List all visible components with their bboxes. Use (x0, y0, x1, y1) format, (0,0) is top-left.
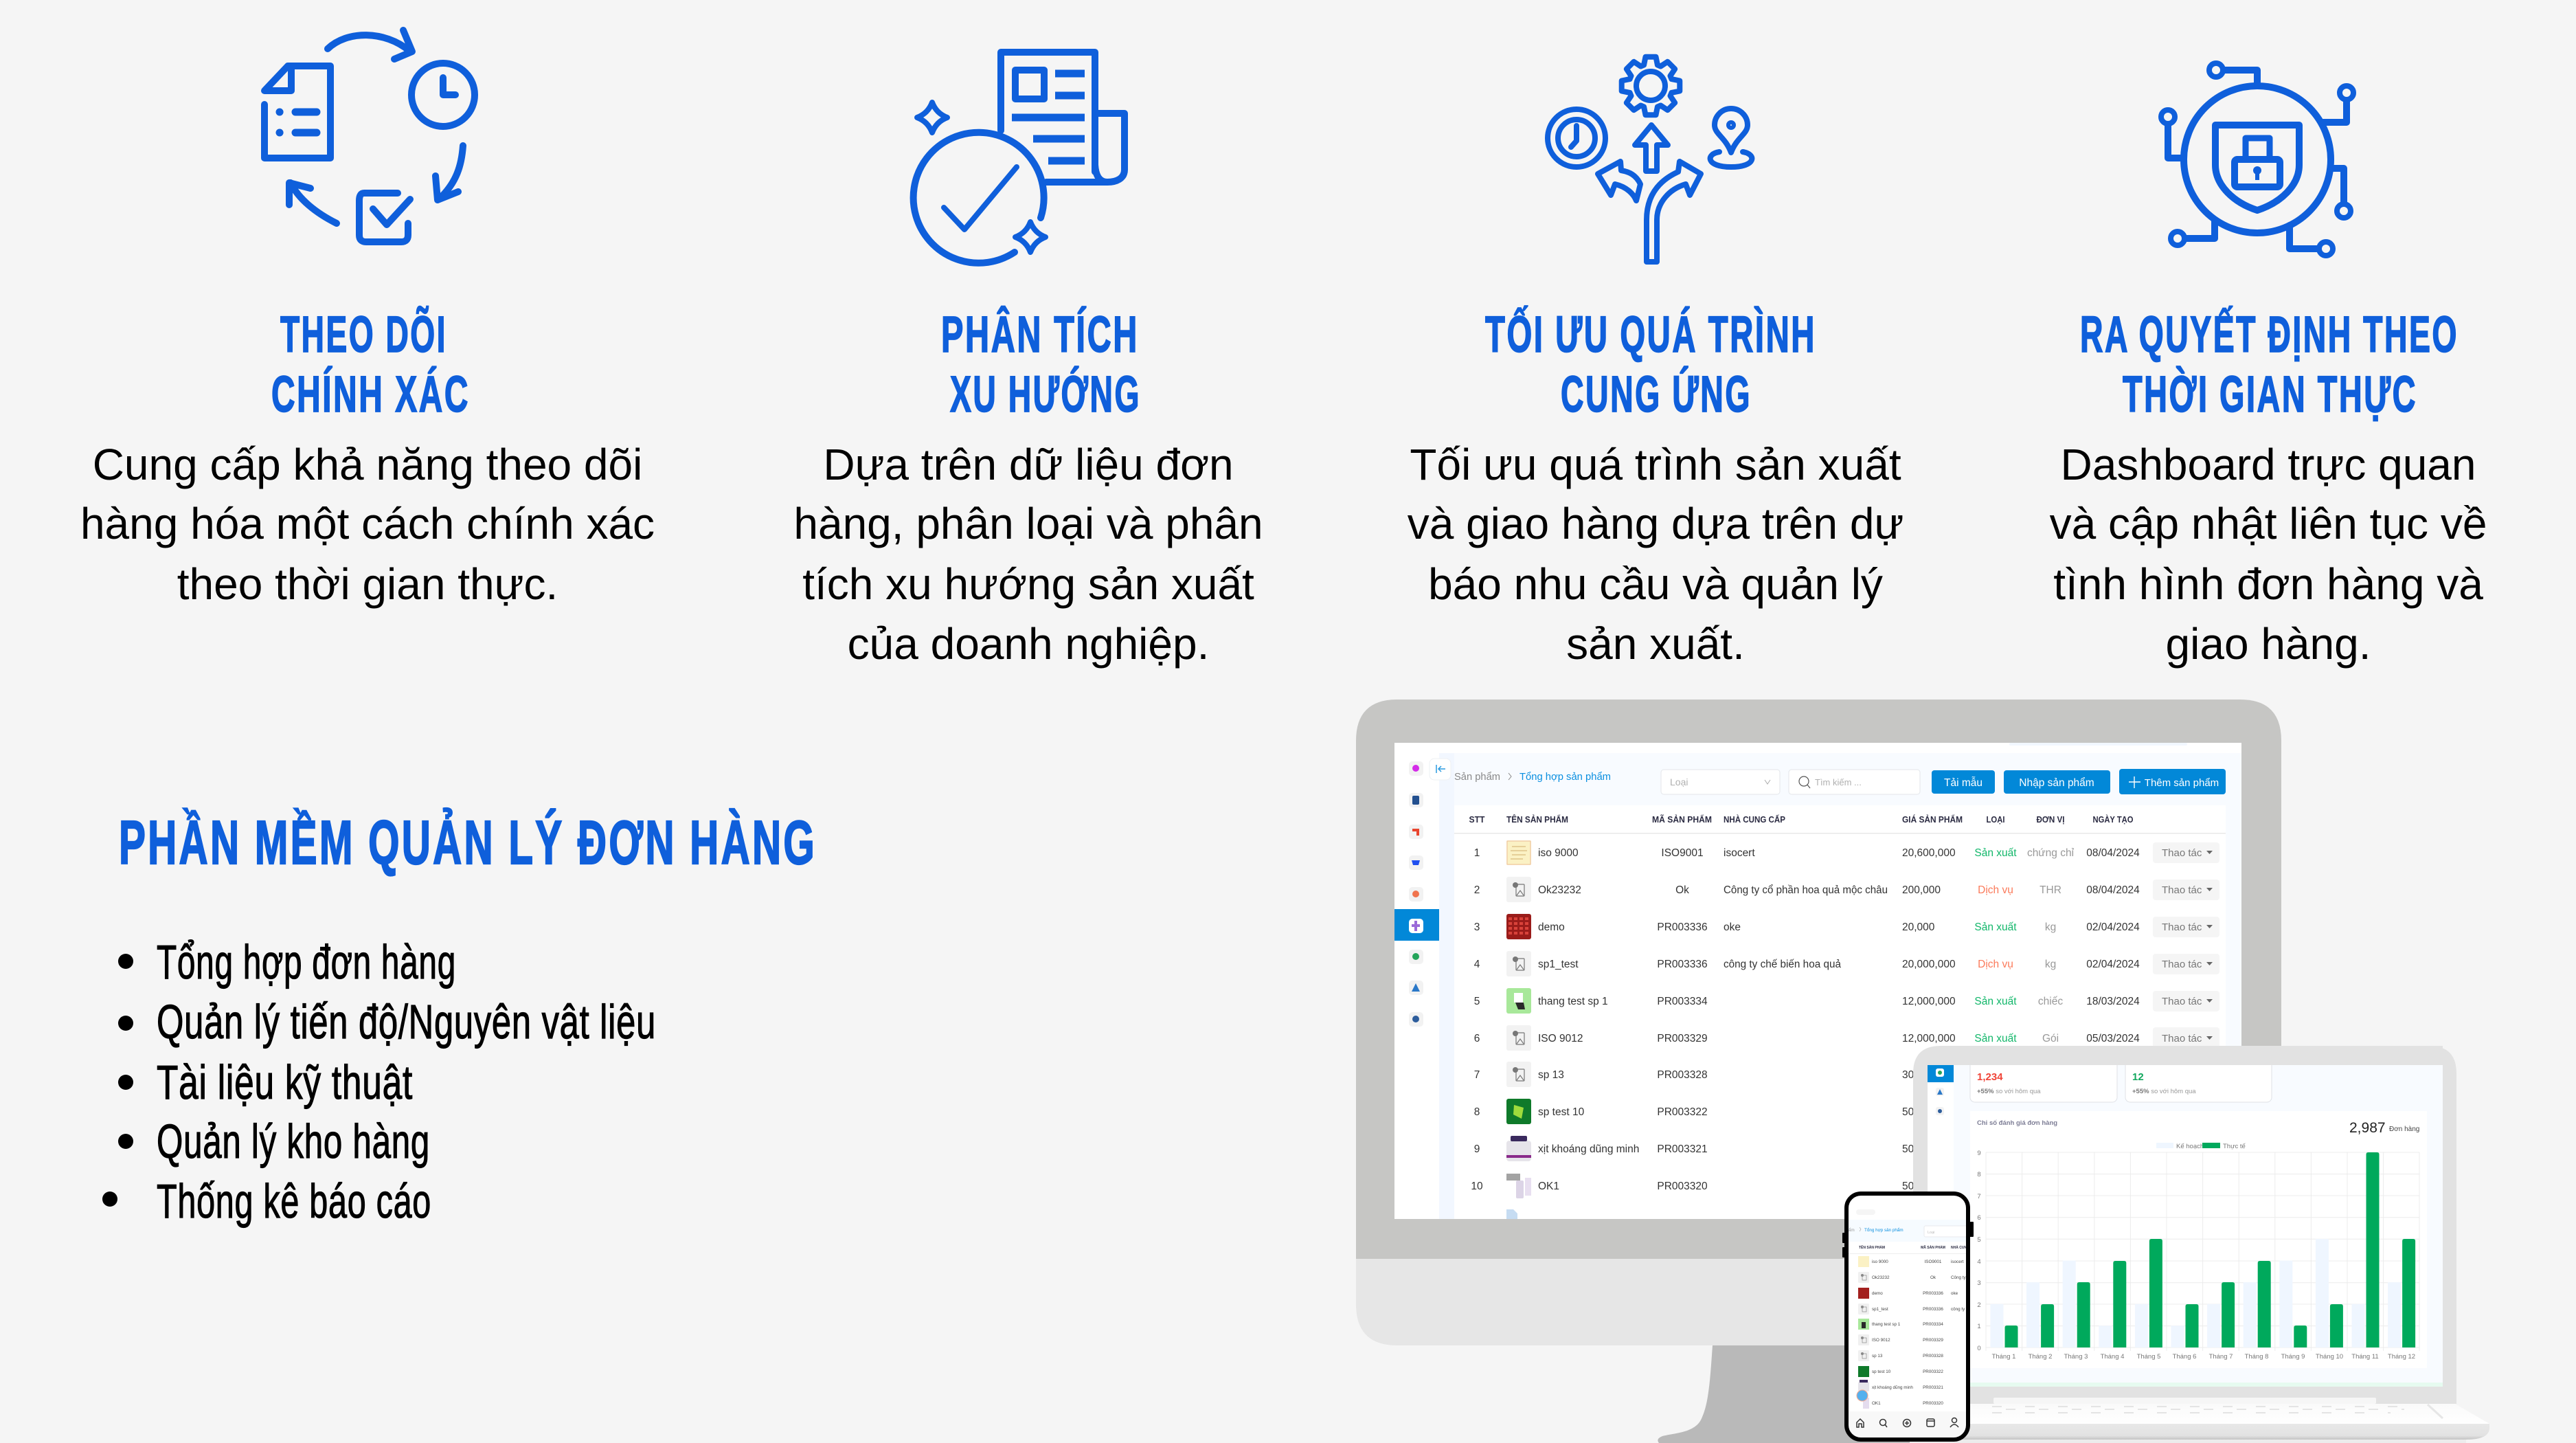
filter dropdown (1661, 770, 1780, 794)
table row 8: 8 (1474, 1106, 1480, 1118)
table row 4: PR003336 (1657, 959, 1708, 970)
monitor mockup (1356, 700, 2281, 1443)
chart grid and axes (1986, 1152, 2419, 1351)
action buttons: Tải mẫu (1944, 777, 1982, 789)
table row 9: xịt khoáng dũng minh (1538, 1143, 1639, 1155)
heading: ra quyet dinh (2080, 306, 2459, 423)
phone filter (1924, 1226, 1969, 1237)
table row 3: kg (2045, 921, 2056, 933)
y axis labels (1977, 1150, 1981, 1352)
table header: GIÁ SẢN PHẨM (1902, 814, 1963, 825)
phone table rows: Ok23232 (1872, 1275, 1890, 1280)
feature list: Quản lý kho hàng (157, 1115, 430, 1168)
phone floating action button (1857, 1390, 1868, 1401)
icon: tracking cycle (264, 30, 475, 242)
chart legend: Thực tế (2223, 1143, 2246, 1150)
laptop mockup (1910, 1046, 2489, 1443)
table row 4 (1474, 951, 2219, 976)
search box: Tìm kiếm ... (1815, 777, 1862, 787)
table row 4: 4 (1474, 959, 1480, 970)
laptop lid (1913, 1046, 2456, 1404)
table row 3: 02/04/2024 (2086, 921, 2140, 933)
laptop screen (1928, 1046, 2443, 1387)
phone table rows: ISO9001 (1925, 1260, 1942, 1264)
text block: ra quyet dinh: và cập nhật liên tục về (2050, 499, 2487, 548)
phone table rows: isocert (1951, 1260, 1964, 1264)
bars: actual (2004, 1152, 2415, 1347)
table row 3: Sản xuất (1974, 921, 2017, 933)
phone breadcrumb: ẩm (1849, 1227, 1855, 1233)
table row 7: 30,000 (1902, 1069, 1935, 1081)
phone side buttons (1842, 1222, 1974, 1257)
table row 5: thang test sp 1 (1538, 996, 1608, 1007)
heading: phan mem quan ly don hang: PHẦN MỀM QUẢN LÝ ĐƠN HÀNG (119, 807, 817, 877)
table row 1: Sản xuất (1974, 847, 2017, 859)
phone table rows: PR003329 (1923, 1338, 1943, 1343)
table row 3: 3 (1474, 921, 1480, 933)
table header: STT (1469, 814, 1485, 825)
laptop base (1910, 1404, 2489, 1443)
x axis labels: Tháng 11 (2351, 1353, 2379, 1361)
table row 6: PR003329 (1657, 1033, 1708, 1044)
table row 4: Thao tác (2162, 959, 2202, 970)
filter dropdown: Loại (1670, 776, 1688, 787)
text block: toi uu qua trinh (1408, 440, 1903, 669)
keyboard hinge bar (1993, 1398, 2376, 1404)
y axis labels: 1 (1977, 1323, 1981, 1330)
phone frame (1846, 1194, 1968, 1440)
chart panel: 2,987 (2349, 1120, 2386, 1136)
table header: ĐƠN VỊ (2036, 814, 2065, 825)
action buttons (1932, 769, 2226, 794)
text block: toi uu qua trinh: báo nhu cầu và quản lý (1428, 559, 1883, 609)
table row 3: demo (1538, 921, 1565, 933)
text block: phan tich xu huong: hàng, phân loại và phân (793, 499, 1263, 548)
phone table rows: OK1 (1872, 1401, 1881, 1406)
breadcrumb: Tổng hợp sản phẩm (1519, 771, 1611, 783)
table header: TÊN SẢN PHẨM (1506, 814, 1568, 825)
table header: NHÀ CUNG CẤP (1724, 814, 1785, 825)
table row 4: 02/04/2024 (2086, 959, 2140, 970)
table row 4: 20,000,000 (1902, 959, 1956, 970)
heading: theo doi chinh xac: CHÍNH XÁC (271, 366, 470, 423)
table row 2: 2 (1474, 884, 1480, 896)
table row 1: isocert (1724, 847, 1755, 859)
table row 1: 08/04/2024 (2086, 847, 2140, 859)
phone table rows: oke (1951, 1291, 1958, 1296)
phone table rows: Ok (1930, 1275, 1936, 1280)
stat card 2 (2125, 1058, 2272, 1102)
panel: ra quyet dinh (2050, 63, 2487, 669)
icon: newspaper and check (914, 52, 1125, 263)
phone table header: MÃ SẢN PHẨM (1921, 1245, 1945, 1250)
y axis labels: 2 (1977, 1301, 1981, 1309)
phone table rows (1858, 1256, 1967, 1409)
x axis labels: Tháng 7 (2209, 1353, 2233, 1361)
stat card 2: 12 (2132, 1071, 2144, 1083)
table row 6: 05/03/2024 (2086, 1033, 2140, 1044)
table row 1: 20,600,000 (1902, 847, 1956, 859)
phone table header: NHÀ CUNG (1951, 1245, 1969, 1250)
phone table rows: PR003321 (1923, 1385, 1943, 1390)
y axis labels: 8 (1977, 1171, 1981, 1178)
monitor chin (1356, 1251, 2281, 1345)
table row 1: chứng chỉ (2027, 847, 2075, 859)
heading: toi uu qua trinh: TỐI ƯU QUÁ TRÌNH (1485, 306, 1816, 363)
text block: phan tich xu huong: của doanh nghiệp. (848, 619, 1209, 669)
table header: LOẠI (1987, 814, 2004, 825)
table background (1454, 805, 2226, 1219)
chart panel: Đơn hàng (2389, 1126, 2419, 1133)
x axis labels: Tháng 10 (2316, 1353, 2343, 1361)
table row 2: Thao tác (2162, 884, 2202, 896)
feature list: Thống kê báo cáo (157, 1174, 431, 1228)
text block: theo doi chinh xac: hàng hóa một cách chính xác (80, 499, 655, 548)
chart legend: Kế hoạch (2176, 1143, 2204, 1150)
table row 5: 18/03/2024 (2086, 996, 2140, 1007)
panel: theo doi chinh xac (80, 30, 655, 609)
x axis labels: Tháng 9 (2281, 1353, 2305, 1361)
text block: toi uu qua trinh: Tối ưu quá trình sản xuất (1410, 440, 1901, 489)
feature list: Tổng hợp đơn hàng (157, 935, 456, 989)
x axis labels: Tháng 5 (2137, 1353, 2160, 1361)
y axis labels: 3 (1977, 1279, 1981, 1287)
panel: toi uu qua trinh cung ung (1408, 57, 1903, 669)
table row 10 (1471, 1174, 1935, 1198)
text block: toi uu qua trinh: sản xuất. (1566, 619, 1745, 669)
stat card 1: 1,234 (1977, 1071, 2003, 1083)
feature list: Quản lý tiến độ/Nguyên vật liệu (157, 995, 656, 1049)
x axis labels: Tháng 6 (2173, 1353, 2196, 1361)
monitor stand (1658, 1345, 1965, 1443)
table row 7 (1474, 1062, 1935, 1087)
table row 2: Công ty cổ phần hoa quả mộc châu (1724, 884, 1888, 896)
table row 6: Thao tác (2162, 1033, 2202, 1044)
text block: ra quyet dinh: tình hình đơn hàng và (2053, 559, 2483, 609)
table row 7: 7 (1474, 1069, 1480, 1081)
table row 2: Ok (1675, 884, 1689, 896)
y axis labels: 4 (1977, 1258, 1981, 1266)
heading: phan tich xu huong (941, 306, 1141, 423)
x axis labels: Tháng 3 (2064, 1353, 2088, 1361)
text block: theo doi chinh xac: Cung cấp khả năng theo dõi (93, 440, 642, 489)
x axis labels: Tháng 4 (2101, 1353, 2124, 1361)
lid cover over card tops (1954, 1046, 2443, 1065)
x axis labels (1992, 1353, 2415, 1361)
text block: ra quyet dinh: giao hàng. (2166, 619, 2371, 669)
table row 3: Thao tác (2162, 921, 2202, 933)
table row 1: Thao tác (2162, 847, 2202, 859)
table row 7: PR003328 (1657, 1069, 1708, 1081)
text block: phan tich xu huong: tích xu hướng sản xuất (802, 559, 1254, 609)
table row 1: 1 (1474, 847, 1480, 859)
table row 5: PR003334 (1657, 996, 1708, 1007)
table row 11 partial thumbnail (1506, 1209, 1517, 1219)
action buttons: Nhập sản phẩm (2019, 777, 2094, 789)
table row 8: sp test 10 (1538, 1106, 1585, 1118)
text block: theo doi chinh xac: theo thời gian thực. (177, 559, 558, 609)
phone table rows: xịt khoáng dũng minh (1872, 1385, 1913, 1390)
text block: ra quyet dinh: Dashboard trực quan (2061, 440, 2476, 489)
table header: NGÀY TẠO (2092, 814, 2134, 825)
table row 9: 50,000 (1902, 1143, 1935, 1155)
table row 8: PR003322 (1657, 1106, 1708, 1118)
table header: MÃ SẢN PHẨM (1652, 814, 1712, 825)
y axis labels: 5 (1977, 1236, 1981, 1244)
breadcrumb (1454, 771, 1611, 783)
phone table rows: demo (1872, 1291, 1883, 1296)
heading: theo doi chinh xac (271, 306, 470, 423)
table row 2 (1474, 877, 2219, 902)
table row 4: kg (2045, 959, 2056, 970)
table row 10: 10 (1471, 1181, 1483, 1192)
table row 1: iso 9000 (1538, 847, 1579, 859)
table row 9: PR003321 (1657, 1143, 1708, 1155)
phone screen (1849, 1196, 1969, 1438)
table row 5: Thao tác (2162, 996, 2202, 1007)
laptop sidebar (1928, 1065, 1954, 1387)
phone table rows: PR003336 (1923, 1291, 1943, 1296)
stat card 1 (1970, 1058, 2117, 1102)
heading: toi uu qua trinh: CUNG ỨNG (1561, 366, 1752, 423)
x axis labels: Tháng 8 (2245, 1353, 2268, 1361)
table row 5: 5 (1474, 996, 1480, 1007)
breadcrumb: Sản phẩm (1454, 771, 1500, 783)
table row 2: THR (2040, 884, 2061, 896)
table row 5: 12,000,000 (1902, 996, 1956, 1007)
phone table rows: iso 9000 (1872, 1260, 1888, 1264)
table row 5: chiếc (2038, 996, 2063, 1007)
table header (1454, 814, 2226, 834)
text block: ra quyet dinh (2050, 440, 2487, 669)
table row 10: OK1 (1538, 1181, 1559, 1192)
table row 9: 9 (1474, 1143, 1480, 1155)
table row 4: Dịch vụ (1978, 959, 2013, 970)
phone mockup (1842, 1194, 1974, 1440)
table row 10: PR003320 (1657, 1181, 1708, 1192)
x axis labels: Tháng 1 (1992, 1353, 2015, 1361)
monitor screen (1394, 743, 2241, 1219)
table row 3: PR003336 (1657, 921, 1708, 933)
phone filter: Loại (1928, 1231, 1934, 1235)
collapse button (1430, 759, 1451, 780)
text block: phan tich xu huong: Dựa trên dữ liệu đơn (823, 440, 1234, 489)
monitor bezel (1356, 700, 2281, 1259)
table row 1: ISO9001 (1661, 847, 1704, 859)
table row 6: Gói (2042, 1033, 2059, 1044)
heading: ra quyet dinh: THỜI GIAN THỰC (2123, 366, 2417, 423)
table row 6: 6 (1474, 1033, 1480, 1044)
text block: toi uu qua trinh: và giao hàng dựa trên dự (1408, 499, 1903, 548)
table row 4: sp1_test (1538, 959, 1579, 970)
text block: phan tich xu huong (793, 440, 1263, 669)
table row 6: Sản xuất (1974, 1033, 2017, 1044)
table row 8: 50,000 (1902, 1106, 1935, 1118)
phone table rows: PR003322 (1923, 1369, 1943, 1374)
phone table rows: PR003336 (1923, 1307, 1943, 1312)
text block: theo doi chinh xac (80, 440, 655, 609)
phone table rows: PR003320 (1923, 1401, 1943, 1406)
phone table header (1849, 1244, 1969, 1254)
phone table rows: Công ty (1951, 1275, 1967, 1280)
heading: theo doi chinh xac: THEO DÕI (280, 306, 447, 363)
table row 2: 08/04/2024 (2086, 884, 2140, 896)
phone table rows: thang test sp 1 (1872, 1322, 1901, 1327)
phone breadcrumb (1849, 1227, 1903, 1233)
x axis labels: Tháng 2 (2029, 1353, 2052, 1361)
stat card 1: +55% so với hôm qua (1977, 1088, 2041, 1095)
table row 1 (1474, 840, 2219, 865)
table row 5: Sản xuất (1974, 996, 2017, 1007)
action buttons: Thêm sản phẩm (2145, 777, 2219, 789)
phone table rows: PR003328 (1923, 1354, 1943, 1358)
panel: phan tich xu huong (793, 52, 1263, 669)
table row 3: oke (1724, 921, 1741, 933)
table row 8 (1474, 1099, 1935, 1124)
chart panel: Chỉ số đánh giá đơn hàng (1977, 1119, 2057, 1127)
heading: phan tich xu huong: XU HƯỚNG (950, 366, 1141, 423)
bars: plan (1991, 1239, 2401, 1347)
phone table rows: sp test 10 (1872, 1369, 1891, 1374)
chart legend (2156, 1143, 2246, 1150)
icon: security circuit (2161, 63, 2353, 256)
heading: phan tich xu huong: PHÂN TÍCH (941, 306, 1139, 363)
table row 6: ISO 9012 (1538, 1033, 1583, 1044)
table row 2: Dịch vụ (1978, 884, 2013, 896)
y axis labels: 7 (1977, 1193, 1981, 1200)
sidebar (1394, 761, 1439, 1027)
icon: process optimisation (1548, 57, 1752, 262)
table row 10: 50,000 (1902, 1181, 1935, 1192)
table row 6: 12,000,000 (1902, 1033, 1956, 1044)
table row 3: 20,000 (1902, 921, 1935, 933)
phone table rows: sp1_test (1872, 1307, 1888, 1312)
feature list (102, 935, 656, 1228)
heading: toi uu qua trinh (1485, 306, 1816, 423)
table row 2: 200,000 (1902, 884, 1941, 896)
stat card 2: +55% so với hôm qua (2132, 1088, 2196, 1095)
phone table header: TÊN SẢN PHẨM (1859, 1244, 1885, 1250)
table row 7: sp 13 (1538, 1069, 1564, 1081)
y axis labels: 9 (1977, 1150, 1981, 1157)
phone table rows: công ty (1951, 1307, 1965, 1312)
table row 5 (1474, 988, 2219, 1014)
chart panel (1970, 1111, 2427, 1368)
y axis labels: 0 (1977, 1345, 1981, 1352)
phone bottom navigation (1849, 1417, 1959, 1438)
table row 9 (1474, 1136, 1935, 1161)
phone breadcrumb: Tổng hợp sản phẩm (1864, 1227, 1903, 1233)
phone table rows: sp 13 (1872, 1354, 1883, 1358)
table row 6 (1474, 1025, 2219, 1051)
feature list: Tài liệu kỹ thuật (157, 1055, 413, 1109)
x axis labels: Tháng 12 (2388, 1353, 2415, 1361)
table row 3 (1474, 914, 2219, 939)
y axis labels: 6 (1977, 1214, 1981, 1222)
phone table rows: PR003334 (1923, 1322, 1943, 1327)
phone table rows: ISO 9012 (1872, 1338, 1890, 1343)
table row 2: Ok23232 (1538, 884, 1581, 896)
table row 4: công ty chế biến hoa quả (1724, 959, 1841, 970)
search box (1789, 770, 1920, 794)
